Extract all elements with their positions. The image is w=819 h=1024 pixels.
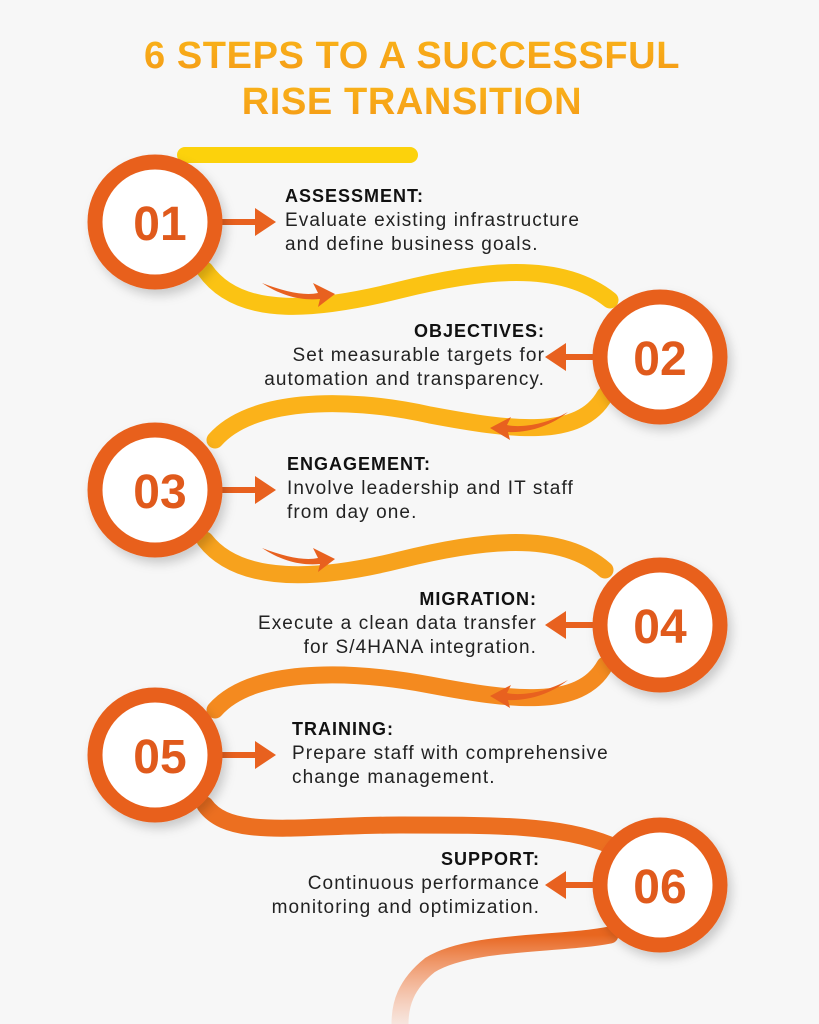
- step 02: 02: [633, 333, 687, 386]
- step 02: OBJECTIVES:: [414, 321, 545, 341]
- title: [144, 35, 680, 123]
- step 03: Involve leadership and IT staff: [287, 478, 574, 499]
- arrows on path: [262, 283, 568, 708]
- step 01: 01: [133, 198, 187, 251]
- step 05: [95, 695, 609, 815]
- step 05: TRAINING:: [292, 719, 394, 739]
- step 06: 06: [633, 861, 687, 914]
- step 04: [258, 565, 720, 685]
- path: winding road: [185, 155, 610, 1024]
- step 06: SUPPORT:: [441, 849, 540, 869]
- step 03: from day one.: [287, 502, 417, 523]
- step 06: Continuous performance: [308, 873, 540, 894]
- step 02: Set measurable targets for: [292, 345, 545, 366]
- step 06: [272, 825, 720, 945]
- step 03: [95, 430, 574, 550]
- step 04: MIGRATION:: [419, 589, 537, 609]
- step 05: change management.: [292, 767, 496, 788]
- step 04: Execute a clean data transfer: [258, 613, 537, 634]
- step 01: [95, 162, 580, 282]
- title: RISE TRANSITION: [242, 81, 582, 123]
- step 01: and define business goals.: [285, 234, 539, 255]
- step 01: Evaluate existing infrastructure: [285, 210, 580, 231]
- title: 6 STEPS TO A SUCCESSFUL: [144, 35, 680, 77]
- step 04: 04: [633, 601, 687, 654]
- step 02: [264, 297, 720, 417]
- step 05: 05: [133, 731, 187, 784]
- step 02: automation and transparency.: [264, 369, 545, 390]
- step 03: ENGAGEMENT:: [287, 454, 431, 474]
- step 01: ASSESSMENT:: [285, 186, 424, 206]
- step 04: for S/4HANA integration.: [304, 637, 537, 658]
- step 06: monitoring and optimization.: [272, 897, 540, 918]
- step 03: 03: [133, 466, 187, 519]
- step 05: Prepare staff with comprehensive: [292, 743, 609, 764]
